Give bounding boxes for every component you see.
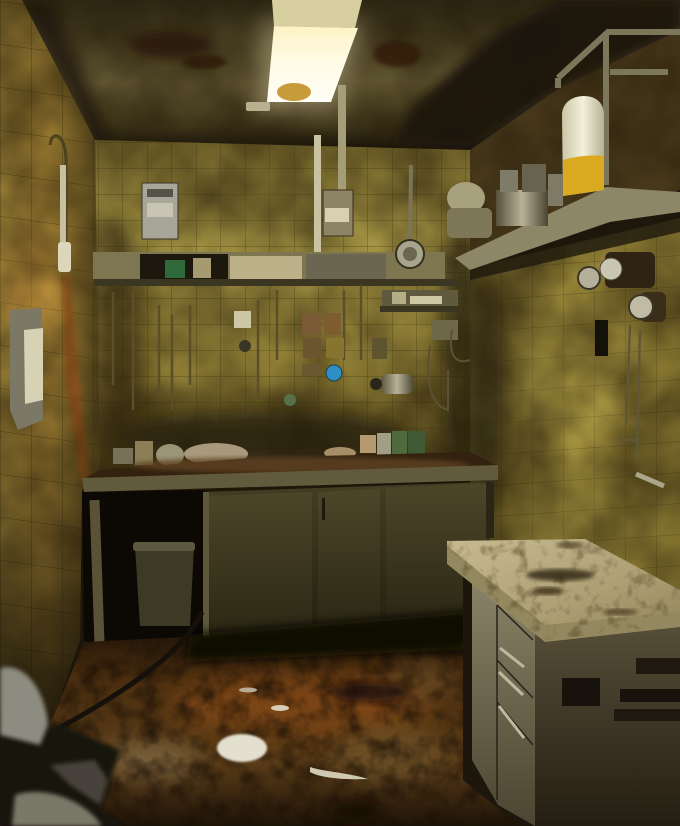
panel: back shelf with items [93,252,458,286]
panel: floor [50,608,504,824]
icon: wall utensils and cable on left wall [50,136,71,272]
stains [447,539,679,640]
icon: wall dispenser [10,308,43,430]
panel: debris bottom left [0,667,125,826]
panel: base cabinets [203,482,494,638]
icon: vertical pipes and junction box [314,85,353,252]
icon: floor hose [50,612,202,733]
panel: under-counter dark recess with bin [82,490,205,645]
panel: wall fittings and hanging tools [113,285,470,410]
icon: hanging ladle [396,165,424,268]
icon: pots on shelf [447,164,563,238]
panel: back wall tiles [94,140,484,470]
panel: foreground kitchen island [440,535,680,826]
panel: countertop [82,452,498,492]
panel: ceiling [20,0,680,150]
panel: right wall tiles [470,218,680,592]
panel: left wall tiles [0,0,100,725]
icon: yellow jug [562,96,604,196]
icon: hanging cans on right wall [578,252,666,486]
panel: right high shelf with containers [447,32,680,280]
panel: small right back shelf [380,290,460,312]
icon: wall-mounted electric box [142,183,178,239]
panel: counter clutter [113,431,425,466]
drawers [497,605,533,800]
icon: fluorescent ceiling lamp [246,0,366,112]
panel: upper right wall above shelf [470,30,680,262]
